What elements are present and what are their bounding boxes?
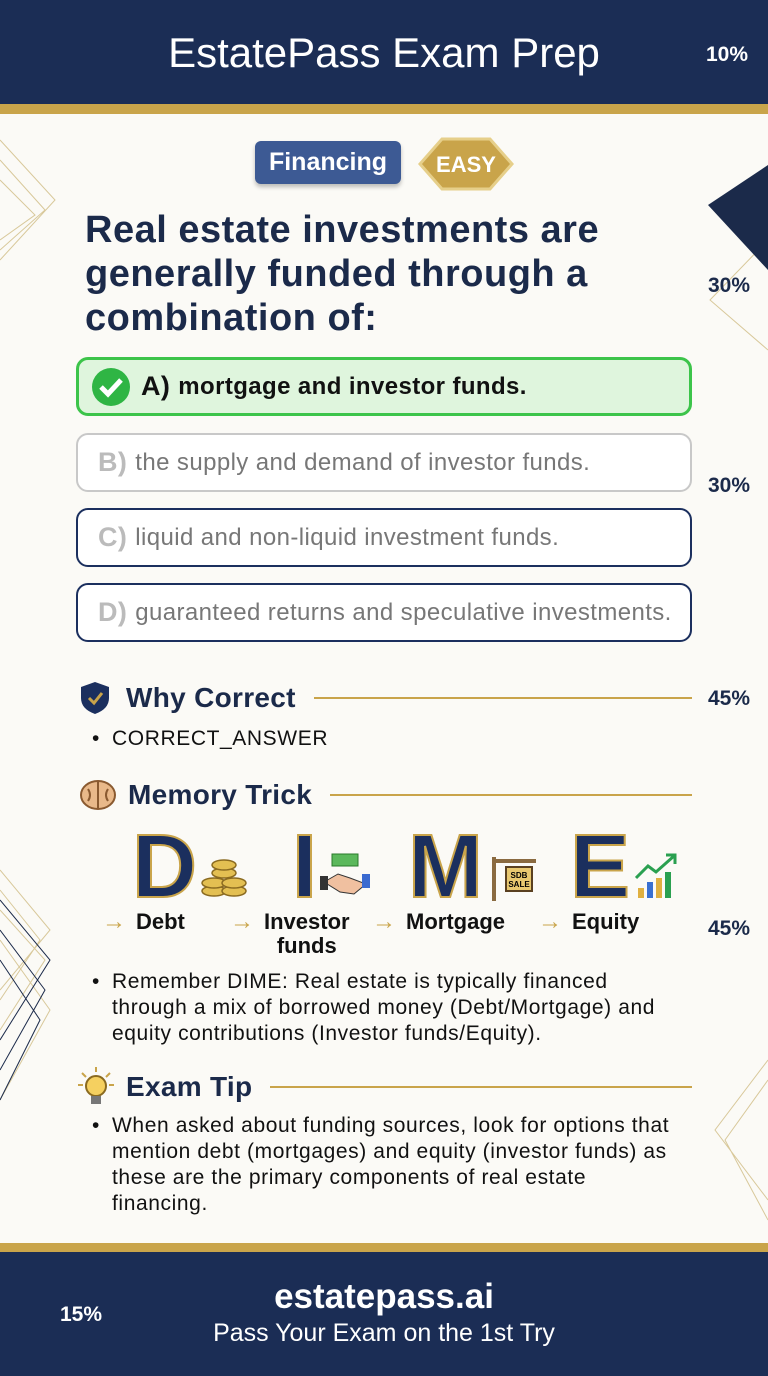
DIME mnemonic: → (102, 908, 126, 935)
DIME mnemonic: M (408, 817, 483, 917)
option B (76, 433, 692, 492)
option C: C) (98, 522, 127, 552)
question: Real estate investments are generally funded through a combination of: (85, 209, 599, 339)
footer (0, 1243, 768, 1252)
option C: liquid and non-liquid investment funds. (135, 524, 559, 550)
DIME mnemonic: D (132, 817, 197, 917)
DIME mnemonic: Mortgage (406, 909, 505, 934)
title: EstatePass Exam Prep (168, 29, 600, 76)
DIME mnemonic: E (570, 817, 630, 917)
DIME mnemonic: Debt (136, 909, 185, 934)
DIME mnemonic: SDB (511, 871, 528, 880)
DIME mnemonic: → (372, 908, 396, 935)
option D (76, 583, 692, 642)
DIME mnemonic (102, 817, 676, 958)
DIME mnemonic: → (538, 908, 562, 935)
option B: B) (98, 447, 127, 477)
text: 10% (706, 43, 748, 66)
DIME mnemonic: → (230, 908, 254, 935)
text: 30% (708, 474, 750, 497)
Memory Trick heading: Memory Trick (128, 779, 312, 810)
badge: Financing (255, 141, 401, 184)
why correct text: CORRECT_ANSWER (112, 727, 328, 750)
Why Correct heading (81, 682, 692, 714)
Memory Trick heading (80, 779, 692, 810)
footer text: estatepass.ai (274, 1277, 494, 1316)
footer text: Pass Your Exam on the 1st Try (213, 1319, 555, 1347)
DIME mnemonic: Investor (264, 909, 350, 934)
option A correct (76, 357, 692, 416)
badge: Financing: Financing (269, 148, 387, 176)
memory trick text: Remember DIME: Real estate is typically financed through a mix of borrowed money (Debt/Mortgage) and equity contributions (Investor funds/Equity). (112, 970, 655, 1045)
text: 45% (708, 917, 750, 940)
text: 30% (708, 274, 750, 297)
DIME mnemonic: Equity (572, 909, 639, 934)
DIME mnemonic: I (292, 817, 317, 917)
option A correct: mortgage and investor funds. (178, 372, 527, 400)
Exam Tip heading: Exam Tip (126, 1071, 252, 1102)
DIME mnemonic: SALE (508, 880, 530, 889)
header (0, 0, 768, 104)
option D: guaranteed returns and speculative investments. (135, 598, 672, 626)
text: 45% (708, 687, 750, 710)
Why Correct heading: Why Correct (126, 682, 296, 713)
option C (76, 508, 692, 567)
text: 15% (60, 1303, 102, 1326)
Exam Tip heading (78, 1067, 692, 1104)
badge: EASY: EASY (436, 152, 496, 177)
DIME mnemonic: funds (277, 933, 337, 958)
exam tip text: When asked about funding sources, look for options that mention debt (mortgages) and equity (investor funds) as these are the primary components of real estate financing. (112, 1114, 669, 1215)
option B: the supply and demand of investor funds. (135, 448, 590, 476)
footer text (213, 1277, 555, 1347)
badge: EASY (418, 138, 514, 190)
option D: D) (98, 597, 127, 627)
option A correct: A) (141, 371, 170, 401)
